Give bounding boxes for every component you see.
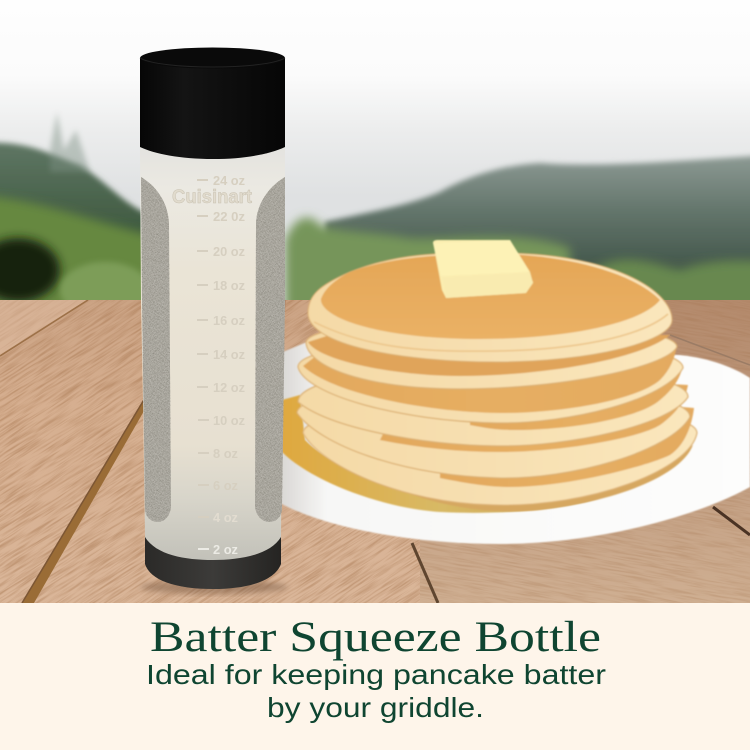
left grip xyxy=(141,177,171,522)
capacity markings: 8 oz xyxy=(213,446,238,461)
capacity markings: 24 oz xyxy=(213,173,245,188)
capacity markings: Cuisinart xyxy=(172,187,253,208)
capacity markings: 12 oz xyxy=(213,380,245,395)
capacity markings: 10 oz xyxy=(213,413,245,428)
pancake 5 xyxy=(297,380,690,478)
batter squeeze bottle xyxy=(140,48,285,589)
cap xyxy=(140,48,285,159)
capacity markings: 16 oz xyxy=(213,313,245,328)
bottle body xyxy=(140,147,285,560)
wooden table xyxy=(0,300,750,603)
pancake 4 xyxy=(298,365,688,446)
pancake 6: bottom xyxy=(303,400,697,511)
capacity markings xyxy=(172,173,253,557)
subtitle line 2: by your griddle. xyxy=(267,692,484,723)
bottle base xyxy=(145,536,281,589)
capacity markings: 6 oz xyxy=(213,478,238,493)
caption band xyxy=(0,603,750,750)
butter pat xyxy=(433,240,533,298)
pancake 1: top xyxy=(308,253,672,362)
background: sky and misty hills xyxy=(0,0,750,320)
pancake 3 xyxy=(298,339,683,423)
subtitle line 1: Ideal for keeping pancake batter xyxy=(146,659,606,690)
syrup pool xyxy=(282,395,600,513)
plate xyxy=(280,340,750,544)
title: Batter Squeeze Bottle xyxy=(150,614,601,661)
pancake 2 xyxy=(306,321,677,389)
capacity markings: 2 oz xyxy=(213,542,238,557)
right grip xyxy=(255,177,285,522)
capacity markings: 20 oz xyxy=(213,244,245,259)
capacity markings: 14 oz xyxy=(213,347,245,362)
capacity markings: 18 oz xyxy=(213,278,245,293)
bottle shadow xyxy=(140,580,288,594)
capacity markings: 4 oz xyxy=(213,510,238,525)
pancake stack xyxy=(297,240,697,511)
capacity markings: 22 0z xyxy=(213,209,245,224)
